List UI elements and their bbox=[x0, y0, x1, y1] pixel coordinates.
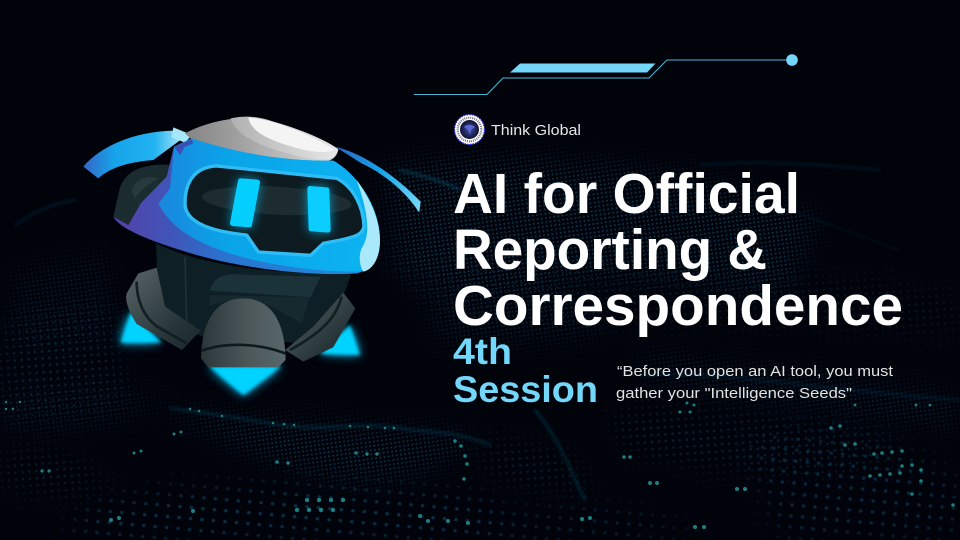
robot: eyes bbox=[230, 178, 331, 233]
robot: right thruster bbox=[285, 293, 355, 362]
quote: “Before you open an AI tool, you must bbox=[617, 364, 893, 380]
quote: gather your "Intelligence Seeds" bbox=[616, 386, 852, 402]
bright teal dots bbox=[5, 401, 955, 529]
robot: dome bbox=[185, 117, 338, 162]
robot: thruster glows bbox=[120, 312, 360, 395]
title: AI for Official bbox=[453, 162, 800, 226]
dotted wave background bbox=[0, 142, 960, 540]
session label bbox=[453, 331, 598, 410]
session label: Session bbox=[453, 369, 598, 410]
robot: right antenna blade bbox=[335, 147, 421, 213]
robot: visor sheen bbox=[201, 183, 352, 219]
robot: left antenna blade bbox=[83, 127, 192, 178]
quote bbox=[616, 364, 893, 402]
title: Reporting & bbox=[453, 218, 767, 282]
circuit line decoration bbox=[414, 54, 798, 94]
robot: centre thruster bbox=[201, 298, 287, 367]
brand name: Think Global bbox=[491, 122, 581, 139]
robot mascot bbox=[83, 117, 421, 395]
decoration: end dot bbox=[786, 54, 798, 66]
decoration: bar bbox=[510, 64, 656, 72]
robot: visor bbox=[185, 166, 364, 255]
robot: left thruster bbox=[126, 268, 201, 350]
session label: 4th bbox=[453, 331, 512, 372]
title bbox=[453, 162, 903, 338]
robot: helmet bbox=[113, 138, 380, 274]
robot: body bbox=[156, 243, 352, 343]
robot: rear shell bbox=[113, 165, 173, 225]
logo badge bbox=[454, 114, 484, 144]
title: Correspondence bbox=[453, 274, 903, 338]
